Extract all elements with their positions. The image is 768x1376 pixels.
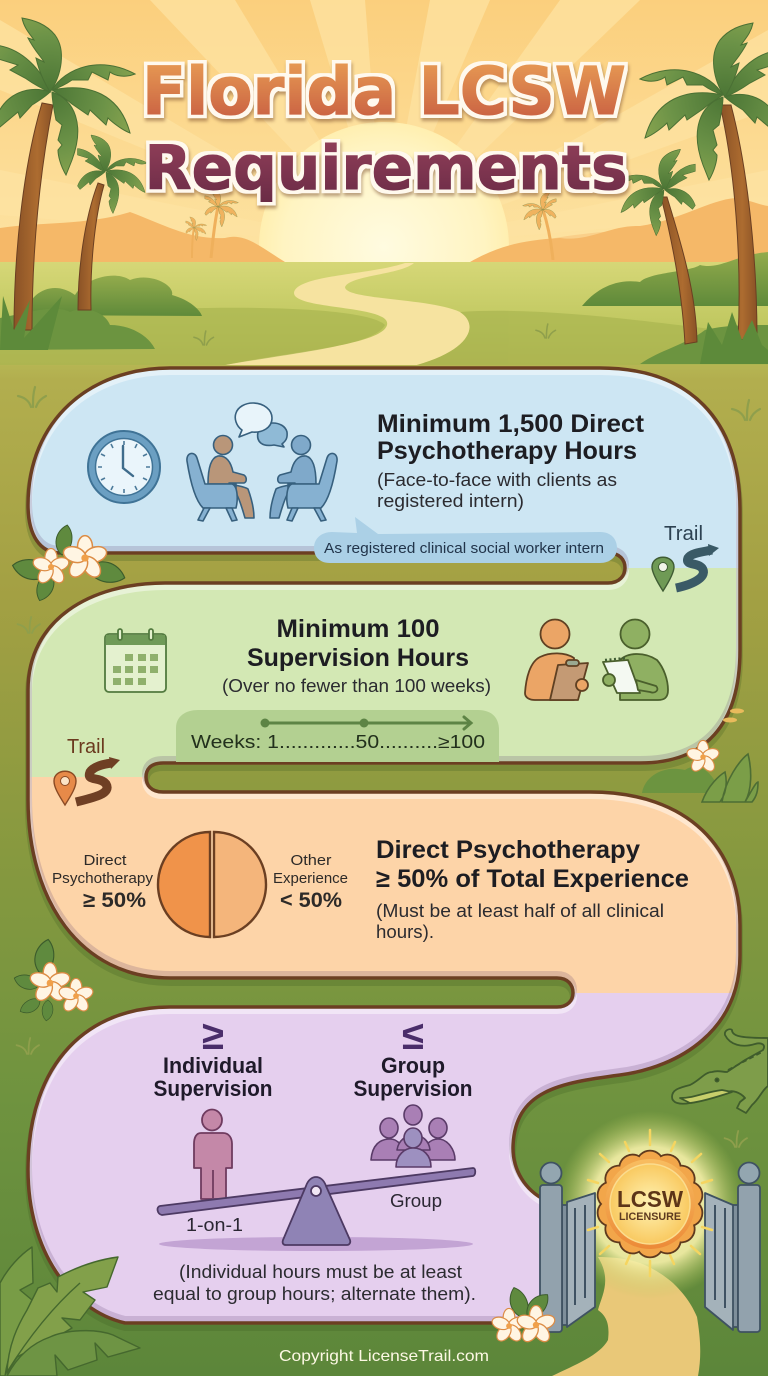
callout: registered intern — [314, 517, 617, 563]
copyright: Copyright LicenseTrail.com — [279, 1348, 489, 1365]
heading: group supervision: Supervision — [354, 1076, 472, 1101]
bushes — [0, 252, 768, 364]
sun rays around badge — [588, 1130, 712, 1276]
title: Requirements — [144, 133, 628, 204]
heading: at least fifty percent: Direct Psychotherapy — [376, 836, 640, 864]
flowers: left between orange and lavender — [12, 938, 94, 1021]
chart: half and half pie — [158, 832, 266, 937]
icon: group of people — [371, 1105, 455, 1167]
label: other experience — [273, 852, 348, 912]
badge scalloped edge — [596, 1151, 704, 1257]
heading: 100 supervision hours: Minimum 100 — [276, 615, 440, 643]
flowers: blue panel corner — [11, 524, 127, 603]
sun — [259, 122, 509, 372]
panel: direct psychotherapy hours — [88, 403, 719, 591]
symbol: less or equal: ≤ — [402, 1014, 424, 1058]
sub text: equal hours note — [153, 1262, 476, 1304]
flowers: bottom of lavender panel — [491, 1285, 557, 1345]
label: direct psychotherapy — [52, 852, 153, 912]
timeline: weeks: Weeks: 1.............50..........≥100 — [191, 732, 485, 752]
seesaw shadow — [159, 1237, 473, 1251]
label: one on one: 1-on-1 — [186, 1215, 243, 1235]
sub text: face-to-face: (Face-to-face with clients as — [377, 470, 617, 490]
icon: calendar — [105, 629, 166, 692]
background: sky with sun rays — [0, 0, 768, 270]
tropical leaves bottom left — [0, 1247, 140, 1376]
winding sand trail — [225, 263, 470, 365]
sub text: half of hours: hours). — [376, 922, 434, 942]
palm left large — [0, 18, 135, 330]
sub text: face-to-face: registered intern) — [377, 491, 524, 511]
heading: individual supervision: Individual — [163, 1053, 263, 1078]
icon: licensure gate left — [540, 1162, 595, 1332]
mountains — [0, 198, 768, 270]
title: Florida LCSW — [142, 53, 626, 130]
label: direct psychotherapy: Direct — [84, 852, 127, 869]
label: group: Group — [390, 1191, 442, 1211]
panel: direct psychotherapy percent — [52, 832, 689, 942]
title — [142, 53, 628, 204]
alligator — [672, 1029, 768, 1113]
icon: individual person — [194, 1110, 232, 1199]
label: other experience: Other — [290, 852, 332, 869]
sub text: equal hours note: equal to group hours; alternate them). — [153, 1284, 476, 1304]
trail marker: top right — [652, 523, 719, 591]
icon: wall clock — [88, 431, 160, 503]
palm right small — [618, 149, 697, 344]
panel: individual versus group supervision — [153, 1014, 476, 1304]
foreground grasses near palms — [0, 296, 768, 364]
icon: therapy session with speech bubbles — [187, 403, 337, 521]
label: other experience: < 50% — [280, 889, 342, 912]
icon: licensure gate right — [705, 1162, 760, 1332]
badge: LCSW licensure: LICENSURE — [619, 1211, 681, 1223]
heading: at least fifty percent: ≥ 50% of Total Experience — [376, 865, 689, 893]
icon: seesaw — [158, 1168, 475, 1245]
icon: supervisor and intern — [525, 620, 668, 700]
badge: LCSW licensure — [588, 1130, 712, 1276]
heading: 1,500 hours: Minimum 1,500 Direct — [377, 410, 645, 438]
heading: 1,500 hours: Psychotherapy Hours — [377, 437, 637, 465]
winding trail to gate — [552, 1257, 700, 1376]
sub text: half of hours: (Must be at least half of all clinical — [376, 901, 664, 921]
trail marker: top right: Trail — [664, 523, 703, 545]
heading: 1,500 hours — [377, 410, 645, 465]
heading: 100 supervision hours: Supervision Hours — [247, 644, 469, 672]
badge: LCSW licensure: LCSW — [617, 1186, 683, 1212]
heading: at least fifty percent — [376, 836, 689, 893]
sub text: face-to-face — [377, 470, 617, 511]
label: direct psychotherapy: Psychotherapy — [52, 870, 153, 887]
heading: individual supervision: Supervision — [154, 1076, 272, 1101]
winding trail band with four colored panels — [0, 360, 768, 1333]
badge glow — [556, 1111, 744, 1299]
trail marker: left — [54, 736, 120, 805]
callout: registered intern: As registered clinical social worker intern — [324, 541, 604, 557]
decoration: right bush with flower and coins — [642, 708, 758, 802]
palm right large — [640, 23, 768, 340]
sub text: weeks: (Over no fewer than 100 weeks) — [222, 676, 491, 696]
distant palm silhouettes — [186, 189, 556, 260]
trail marker: left: Trail — [67, 736, 105, 758]
darker meadow slopes — [0, 308, 768, 365]
heading: group supervision: Group — [381, 1053, 445, 1078]
heading: 100 supervision hours — [247, 615, 469, 672]
heading: group supervision — [354, 1053, 472, 1101]
label: direct psychotherapy: ≥ 50% — [83, 889, 146, 912]
small grass tufts — [17, 324, 760, 1147]
label: other experience: Experience — [273, 870, 348, 887]
band shadow — [28, 373, 740, 1328]
sub text: half of hours — [376, 901, 664, 942]
heading: individual supervision — [154, 1053, 272, 1101]
palm left small — [78, 135, 148, 310]
panel: supervision hours — [54, 615, 668, 805]
symbol: greater or equal: ≥ — [202, 1014, 224, 1058]
sub text: equal hours note: (Individual hours must be at least — [179, 1262, 462, 1282]
timeline: weeks — [176, 710, 499, 762]
